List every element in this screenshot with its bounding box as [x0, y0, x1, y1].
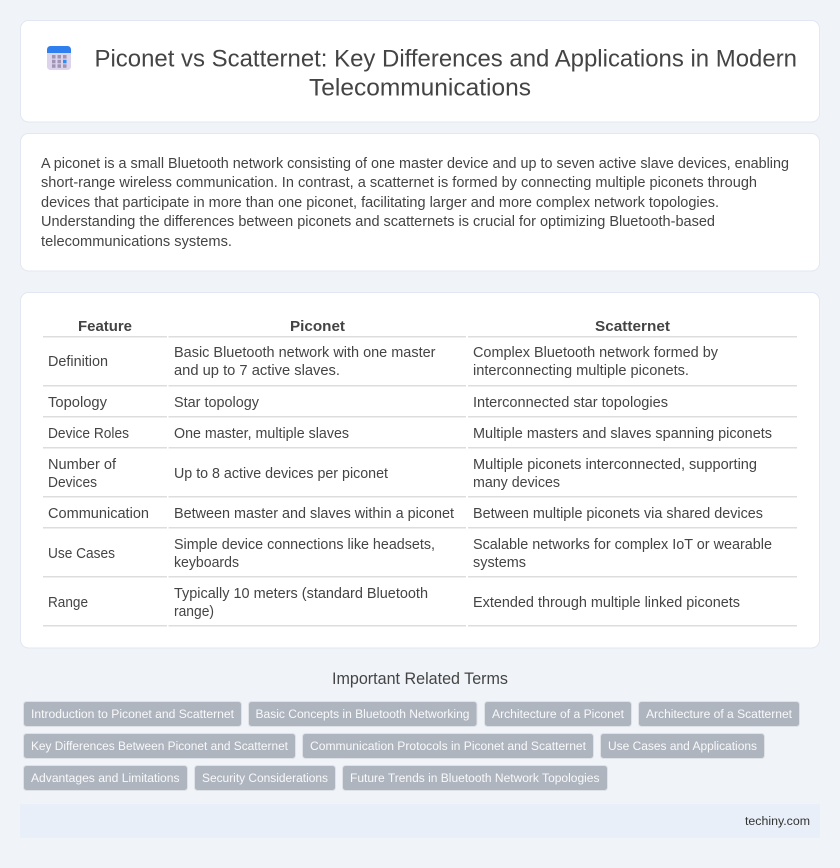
- text block: introduction paragraph: devices that participate in more than one piconet, facilitating larger and more complex network topologies.: [41, 195, 719, 211]
- table row: topology: Star topology: [174, 395, 260, 411]
- table row: communication: Between multiple piconets via shared devices: [473, 506, 763, 522]
- tag: use cases: Use Cases and Applications: [608, 739, 757, 753]
- table row: use cases: Use Cases: [48, 546, 115, 562]
- table row: communication: Between master and slaves within a piconet: [174, 506, 454, 522]
- tag: piconet architecture: [484, 702, 632, 726]
- tag: future trends: [342, 766, 608, 790]
- tag: use cases: [600, 734, 764, 758]
- table row: definition: Definition: [48, 354, 108, 370]
- title: Piconet vs Scatternet: Key Differences and Applications in Modern: [94, 46, 797, 72]
- panel: comparison table: [20, 292, 820, 648]
- table row: range: Typically 10 meters (standard Bluetooth: [174, 586, 428, 602]
- table header: Scatternet: [595, 319, 670, 335]
- table row: range: Range: [48, 595, 88, 611]
- tag: future trends: Future Trends in Bluetooth Network Topologies: [350, 771, 600, 785]
- table header: [43, 319, 797, 338]
- text block: introduction paragraph: [41, 156, 789, 250]
- title: [94, 46, 797, 102]
- tag: advantages: Advantages and Limitations: [31, 771, 180, 785]
- tag list: related terms: [24, 702, 800, 790]
- table row: definition: [43, 345, 797, 386]
- table row: number of devices: many devices: [473, 475, 560, 491]
- table row: definition: Complex Bluetooth network formed by: [473, 345, 719, 361]
- panel: title card: [20, 20, 820, 122]
- table row: device roles: Multiple masters and slaves spanning piconets: [473, 426, 772, 442]
- tag: piconet architecture: Architecture of a Piconet: [492, 707, 625, 721]
- table row: communication: Communication: [48, 506, 149, 522]
- icon: calendar: [47, 46, 71, 70]
- tag: introduction: Introduction to Piconet and Scatternet: [31, 707, 235, 721]
- text block: introduction paragraph: A piconet is a small Bluetooth network consisting of one master device and up to seven active slave devices, enabling: [41, 156, 789, 172]
- tag: security: Security Considerations: [202, 771, 328, 785]
- table row: range: range): [174, 604, 214, 620]
- table row: range: Extended through multiple linked piconets: [473, 595, 740, 611]
- tag: key differences: [24, 734, 296, 758]
- text block: introduction paragraph: Understanding the differences between piconets and scatternets is crucial for optimizing Bluetooth-based: [41, 214, 715, 230]
- table row: use cases: systems: [473, 555, 526, 571]
- tag: communication protocols: Communication Protocols in Piconet and Scatternet: [310, 739, 587, 753]
- table row: number of devices: Multiple piconets interconnected, supporting: [473, 457, 757, 473]
- table row: use cases: Simple device connections like headsets,: [174, 537, 435, 553]
- table row: range: [43, 586, 797, 626]
- tag: security: [194, 766, 336, 790]
- table row: topology: Interconnected star topologies: [473, 395, 668, 411]
- table row: use cases: keyboards: [174, 555, 239, 571]
- tag: communication protocols: [302, 734, 594, 758]
- table row: definition: Basic Bluetooth network with one master: [174, 345, 436, 361]
- title: Telecommunications: [309, 74, 531, 102]
- table row: device roles: [43, 426, 797, 448]
- panel: introduction: [20, 134, 820, 271]
- tag: advantages: [24, 766, 188, 790]
- tag: scatternet architecture: [638, 702, 800, 726]
- text block: introduction paragraph: short-range wireless communication. In contrast, a scatternet is formed by connecting multiple piconets through: [41, 175, 757, 191]
- table row: device roles: Device Roles: [48, 426, 129, 442]
- table row: number of devices: [43, 457, 797, 498]
- table row: use cases: Scalable networks for complex IoT or wearable: [473, 537, 772, 553]
- tag: introduction: [24, 702, 242, 726]
- table row: definition: interconnecting multiple piconets.: [473, 363, 689, 379]
- table row: number of devices: Up to 8 active devices per piconet: [174, 466, 388, 482]
- heading: important related terms: Important Related Terms: [332, 670, 508, 688]
- text block: introduction paragraph: telecommunications systems.: [41, 234, 232, 250]
- table row: number of devices: Devices: [48, 475, 97, 491]
- table row: definition: and up to 7 active slaves.: [174, 363, 340, 379]
- table header: Piconet: [290, 319, 345, 335]
- footer: techiny.com: [745, 814, 810, 828]
- footer: [20, 804, 820, 838]
- tag: scatternet architecture: Architecture of a Scatternet: [646, 707, 793, 721]
- table row: device roles: One master, multiple slaves: [174, 426, 349, 442]
- table row: topology: Topology: [48, 395, 108, 411]
- tag: key differences: Key Differences Between Piconet and Scatternet: [31, 739, 289, 753]
- table row: use cases: [43, 537, 797, 578]
- table header: Feature: [78, 319, 132, 335]
- table row: number of devices: Number of: [48, 457, 117, 473]
- table row: topology: [43, 395, 797, 418]
- table row: communication: [43, 506, 797, 528]
- tag: basic concepts: [248, 702, 477, 726]
- tag: basic concepts: Basic Concepts in Bluetooth Networking: [256, 707, 470, 721]
